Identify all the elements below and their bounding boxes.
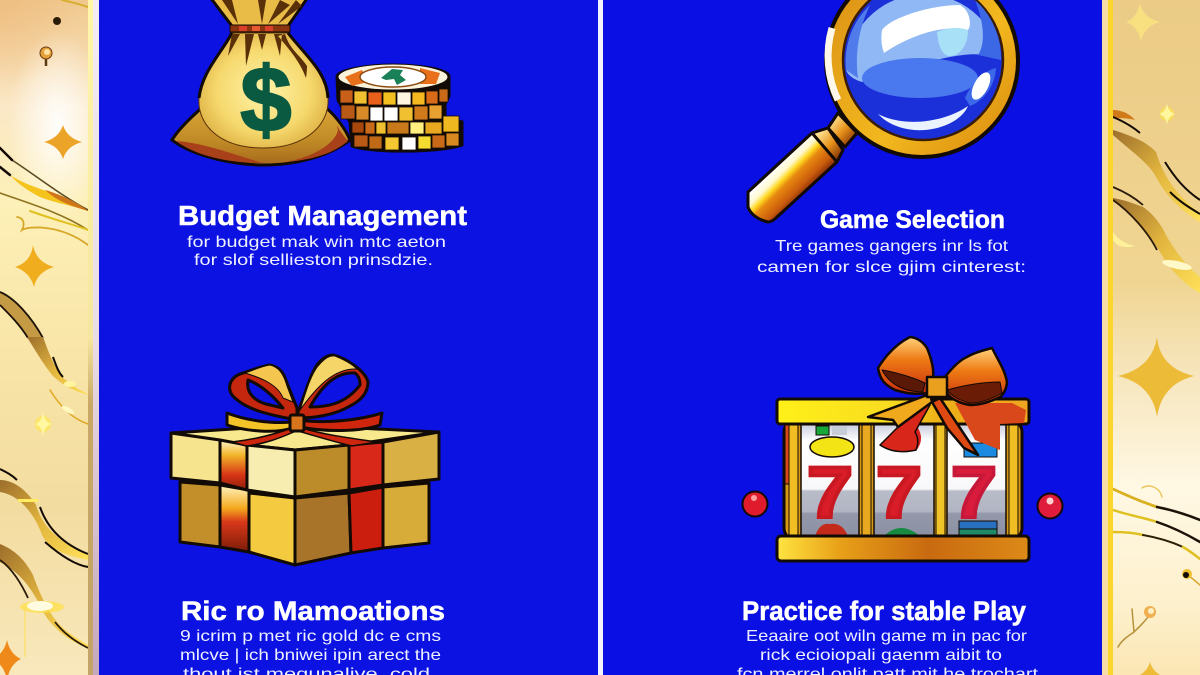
icon: gold bead bbox=[40, 47, 52, 66]
panel: blue right column bbox=[603, 0, 1102, 675]
text: practice description: rick ecioiopali gaenm aibit to bbox=[760, 647, 1002, 664]
bag lower sack bbox=[172, 105, 350, 165]
text: practice description bbox=[737, 628, 1039, 675]
text: practice description: Eeaaire oot wiln game m in pac for bbox=[746, 628, 1028, 645]
bag neck flare bbox=[210, 0, 308, 26]
text: game selection description: Tre games gangers inr ls fot bbox=[775, 238, 1009, 255]
icon: large gold star bbox=[1118, 337, 1194, 417]
icon: magnifying glass bbox=[748, 0, 1018, 222]
icon: bright flare bbox=[20, 601, 64, 657]
icon: bottom star bbox=[1140, 662, 1160, 675]
heading: Budget Management: Budget Management bbox=[178, 200, 467, 231]
sevens: 7 bbox=[807, 453, 853, 533]
drum bbox=[784, 420, 1022, 540]
icon: small glow star bbox=[1159, 103, 1175, 125]
reel separators bbox=[785, 424, 1018, 536]
icon: gold charm bbox=[1144, 606, 1156, 618]
text: promotions description bbox=[180, 628, 441, 675]
text: budget description: for slof sellieston prinsdzie. bbox=[194, 252, 433, 269]
sevens: 7 bbox=[876, 453, 922, 533]
icon: glow star bbox=[35, 411, 52, 437]
ribbon bow bbox=[230, 365, 297, 420]
heading: Ric ro Mamoations: Ric ro Mamoations bbox=[181, 596, 445, 626]
text: promotions description: mlcve | ich bniwei ipin arect the bbox=[180, 647, 441, 664]
sevens: 7 bbox=[951, 453, 997, 533]
panel: blue left column bbox=[99, 0, 598, 675]
lens reflections bbox=[846, 0, 1001, 82]
left ball bbox=[742, 492, 768, 516]
reel: left bbox=[801, 424, 859, 536]
text: game selection description: camen for slce gjim cinterest: bbox=[757, 259, 1026, 276]
neck band bbox=[230, 25, 290, 32]
reel: right bbox=[947, 424, 1006, 536]
right gold decorative strip bbox=[1102, 0, 1200, 675]
icon: bottom star bbox=[0, 640, 21, 675]
icon: dark bead bbox=[1182, 569, 1192, 579]
text: promotions description: 9 icrim p met ric gold dc e cms bbox=[180, 628, 441, 645]
reel: centre bbox=[874, 424, 934, 536]
box lid faces bbox=[171, 433, 220, 483]
box base bbox=[180, 482, 220, 547]
icon: slot machine with bow bbox=[742, 337, 1062, 561]
bag neck folds bbox=[222, 0, 302, 24]
bottom bar bbox=[777, 536, 1029, 561]
heading: Game Selection: Game Selection bbox=[820, 206, 1005, 234]
reel symbols bbox=[810, 426, 997, 536]
coin emblem bbox=[381, 69, 406, 85]
text: budget description: for budget mak win mtc aeton bbox=[187, 234, 446, 251]
sevens bbox=[807, 453, 997, 533]
heading: Practice for stable Play: Practice for stable Play bbox=[742, 596, 1026, 626]
right ball bbox=[1038, 494, 1062, 518]
box lid top bbox=[171, 425, 439, 450]
icon: gold star bbox=[44, 125, 82, 159]
bag body bbox=[199, 33, 328, 148]
ring bbox=[826, 0, 1018, 157]
bag folds bbox=[228, 34, 307, 78]
top bar bbox=[777, 399, 1029, 424]
icon: top star bbox=[1126, 3, 1160, 41]
left gold decorative strip bbox=[0, 0, 108, 675]
coin stack bbox=[337, 64, 462, 151]
handle bbox=[748, 113, 857, 222]
icon: dark bead bbox=[53, 17, 61, 25]
text: budget description bbox=[187, 234, 446, 269]
dollar sign: $ bbox=[240, 49, 292, 151]
bow bbox=[868, 337, 1026, 455]
icon: money bag with coin stack bbox=[172, 0, 462, 165]
text: game selection description bbox=[757, 238, 1026, 276]
icon: gold star bbox=[15, 245, 54, 287]
icon: gift box bbox=[171, 355, 439, 565]
